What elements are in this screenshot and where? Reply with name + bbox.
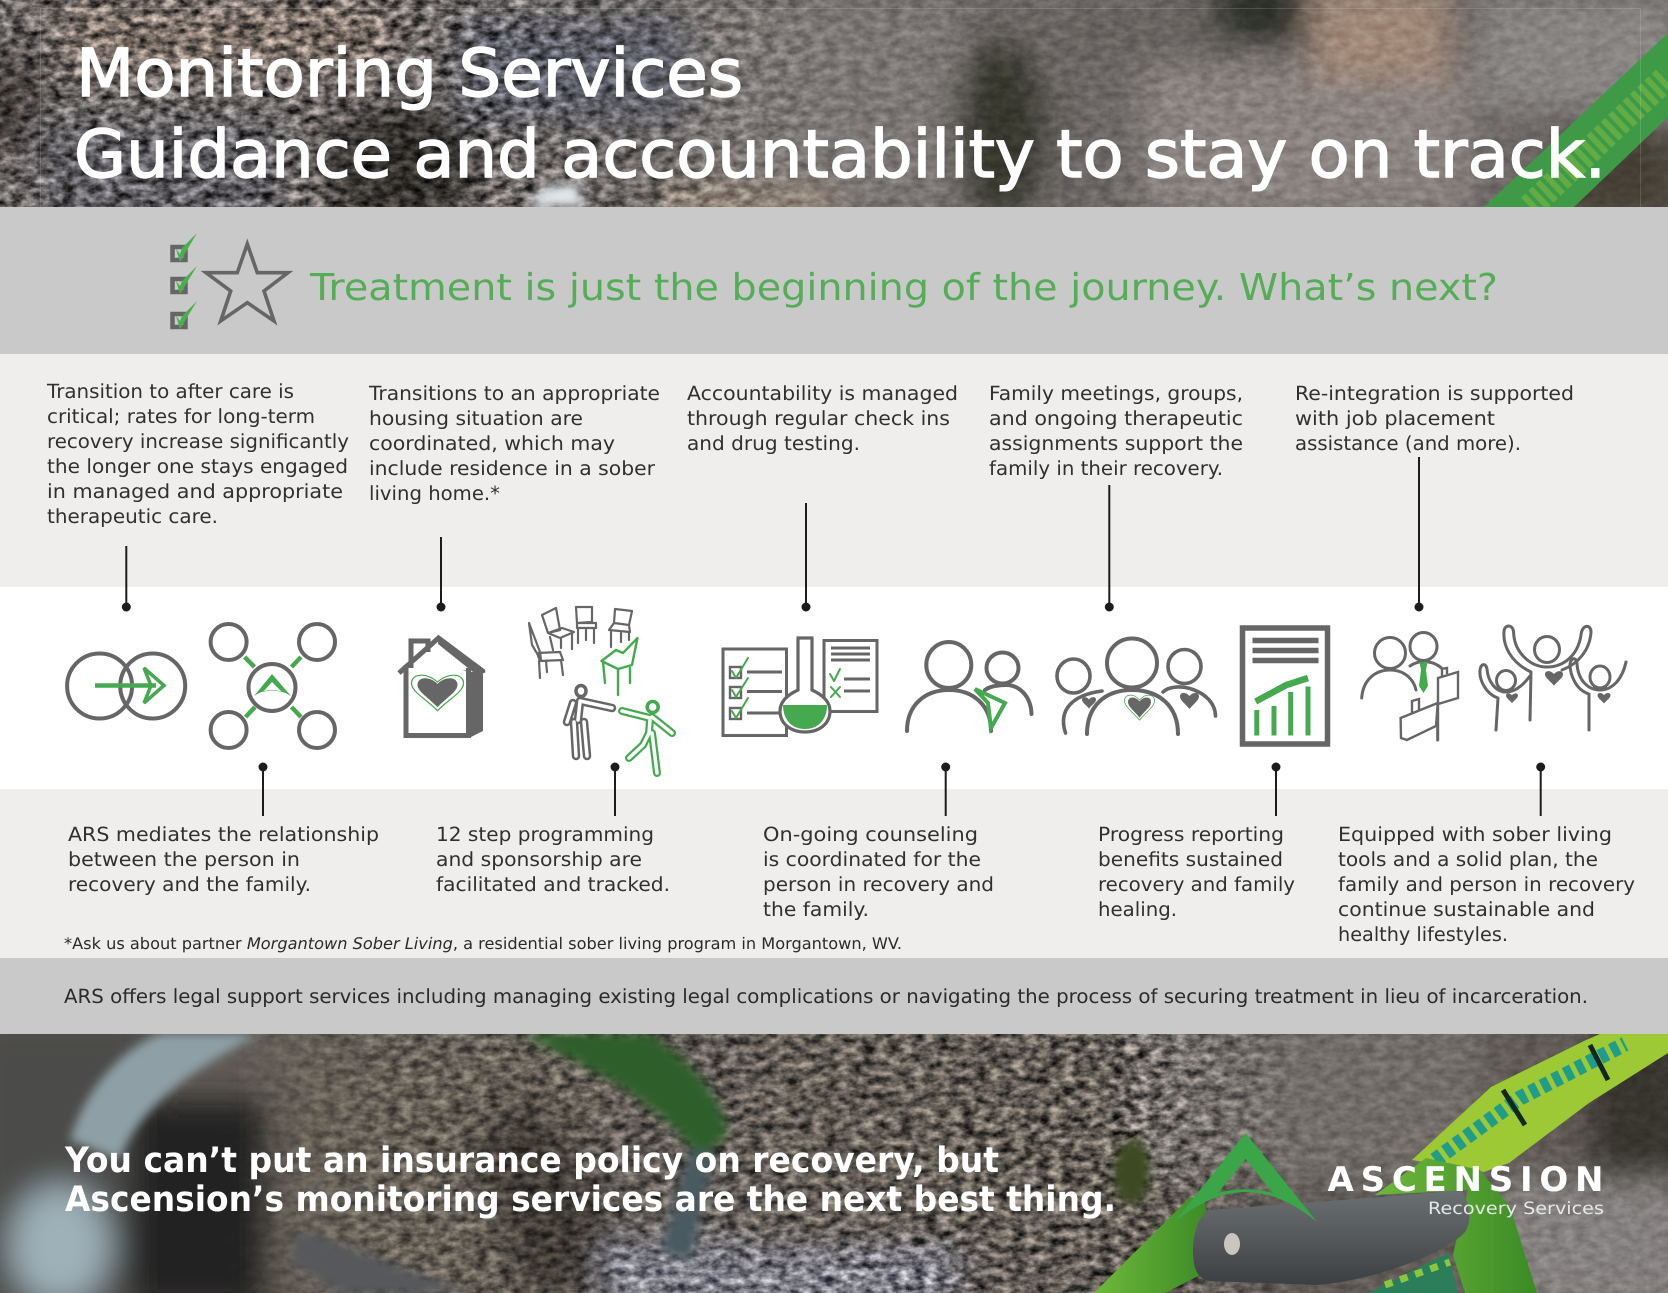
legal support text: ARS offers legal support services including managing existing legal complications or navigating the process of securing treatment in lieu of incarceration.	[64, 985, 1588, 1008]
text: accountability	[687, 382, 958, 455]
closing statement	[64, 1141, 1116, 1220]
title	[74, 35, 1606, 193]
text: sober living tools: tools and a solid plan, the	[1338, 848, 1598, 871]
text: ARS mediates: ARS mediates the relationship	[68, 823, 379, 846]
text: housing: Transitions to an appropriate	[368, 382, 660, 405]
logo: Ascension Recovery Services: Recovery Services	[1428, 1199, 1604, 1219]
icon: celebrating family	[1480, 626, 1626, 730]
text: family meetings: Family meetings, groups,	[989, 382, 1243, 405]
text: accountability: and drug testing.	[687, 432, 860, 455]
text: progress reporting	[1098, 823, 1295, 921]
text: ARS mediates: recovery and the family.	[68, 873, 311, 896]
text: on-going counseling: the family.	[763, 898, 869, 921]
text: housing: include residence in a sober	[369, 457, 656, 480]
text: housing	[368, 382, 660, 505]
panel: upper descriptions band	[0, 354, 1668, 587]
panel: icon band	[0, 587, 1668, 789]
icon: twelve step circle of chairs and sponsor figures	[529, 607, 672, 773]
text: after care transition: Transition to after care is	[46, 380, 294, 403]
text: sober living tools: continue sustainable and	[1338, 898, 1595, 921]
text: after care transition: recovery increase significantly	[47, 430, 349, 453]
panel: legal support band	[0, 958, 1668, 1034]
closing statement: You can’t put an insurance policy on recovery, but	[64, 1141, 999, 1181]
lower leader lines	[260, 764, 1544, 816]
logo: Ascension Recovery Services: ASCENSION	[1328, 1160, 1604, 1200]
title: Guidance and accountability to stay on track.	[74, 116, 1606, 193]
header photo background	[0, 0, 1668, 207]
text: 12 step programming	[436, 823, 670, 896]
icon: business people with briefcases	[1362, 632, 1458, 740]
text: family meetings: and ongoing therapeutic	[989, 407, 1243, 430]
text: ARS mediates: between the person in	[68, 848, 300, 871]
text: on-going counseling	[763, 823, 994, 921]
text: on-going counseling: person in recovery and	[763, 873, 994, 896]
icon: checklist, flask and report	[723, 638, 877, 736]
icon: family with hearts	[1057, 638, 1216, 734]
text: 12 step programming: and sponsorship are	[436, 848, 642, 871]
text: ARS mediates	[68, 823, 379, 896]
text: re-integration: Re-integration is supported	[1295, 382, 1574, 405]
text: on-going counseling: On-going counseling	[763, 823, 978, 846]
text: family meetings: family in their recovery.	[989, 457, 1223, 480]
text: family meetings	[989, 382, 1243, 480]
panel: lower descriptions band	[0, 789, 1668, 958]
text: housing: coordinated, which may	[369, 432, 615, 455]
text: 12 step programming: 12 step programming	[436, 823, 654, 846]
text: progress reporting: recovery and family	[1098, 873, 1295, 896]
upper leader lines	[123, 457, 1422, 610]
text: sober living tools	[1338, 823, 1635, 946]
icon: counselor and person	[907, 642, 1032, 731]
icon: checklist with star	[172, 233, 288, 329]
text: progress reporting: Progress reporting	[1098, 823, 1284, 846]
text: progress reporting: benefits sustained	[1098, 848, 1283, 871]
icon: mediation network	[211, 624, 335, 748]
text: progress reporting: healing.	[1098, 898, 1177, 921]
text: re-integration	[1295, 382, 1574, 455]
text: housing: living home.*	[369, 482, 500, 505]
icon: overlapping circles with arrow	[67, 654, 185, 718]
text: after care transition: therapeutic care.	[47, 505, 218, 528]
subheading: Treatment is just the beginning of the journey. What’s next?	[309, 266, 1498, 309]
text: 12 step programming: facilitated and tracked.	[436, 873, 670, 896]
text: accountability: Accountability is managed	[687, 382, 958, 405]
footnote: *Ask us about partner Morgantown Sober Living, a residential sober living program in Morgantown, WV.	[64, 934, 902, 953]
text: after care transition: in managed and appropriate	[47, 480, 343, 503]
text: re-integration: with job placement	[1295, 407, 1495, 430]
text: sober living tools: family and person in recovery	[1338, 873, 1635, 896]
text: sober living tools: Equipped with sober living	[1338, 823, 1612, 846]
text: housing: housing situation are	[369, 407, 583, 430]
footer photo background	[0, 1020, 1668, 1293]
text: after care transition: the longer one stays engaged	[47, 455, 348, 478]
panel: subheading band	[0, 207, 1668, 354]
title: Monitoring Services	[76, 35, 743, 112]
text: family meetings: assignments support the	[989, 432, 1243, 455]
icon: progress report	[1242, 628, 1328, 744]
text: sober living tools: healthy lifestyles.	[1338, 923, 1508, 946]
text: on-going counseling: is coordinated for the	[763, 848, 981, 871]
text: accountability: through regular check ins	[687, 407, 950, 430]
icon: house with heart	[399, 636, 486, 738]
logo: Ascension Recovery Services	[1174, 1133, 1604, 1222]
text: re-integration: assistance (and more).	[1295, 432, 1521, 455]
closing statement: Ascension’s monitoring services are the next best thing.	[65, 1180, 1116, 1220]
text: after care transition	[46, 380, 349, 528]
text: after care transition: critical; rates for long-term	[47, 405, 315, 428]
